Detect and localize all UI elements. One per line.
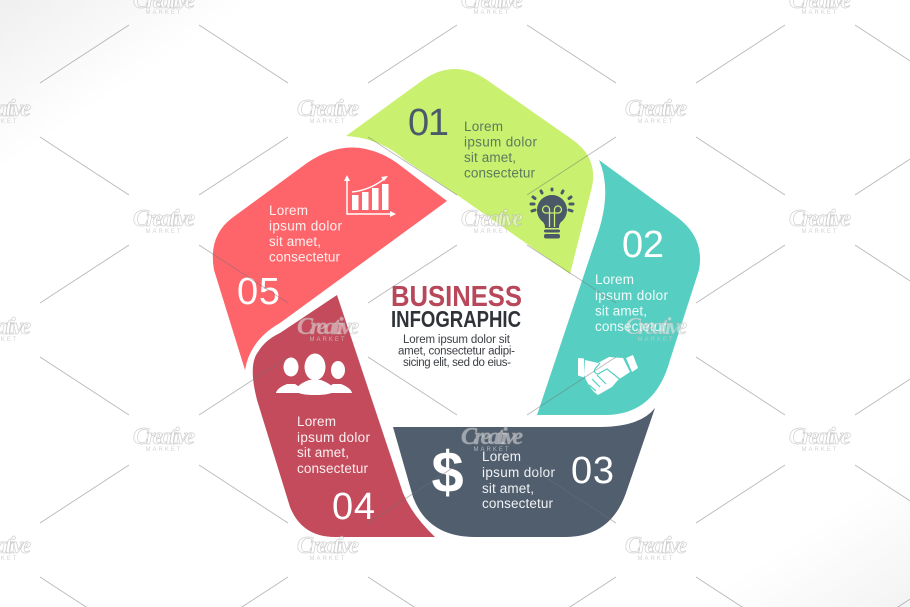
text: step 04: consectetur [297, 461, 368, 476]
icon: growth chart [344, 175, 396, 217]
watermarks: Creative [297, 314, 359, 340]
panel: step 04 [253, 295, 435, 537]
icon: light bulb [531, 189, 573, 238]
panel: step 05 [213, 148, 447, 370]
panel: step 02 [537, 160, 700, 415]
icon: handshake [578, 355, 638, 395]
text: step 04: ipsum dolor [297, 430, 370, 445]
text: step 05: Lorem [269, 203, 308, 218]
text: step 03: ipsum dolor [482, 465, 556, 480]
text: step 01 [464, 119, 538, 180]
dark segment [393, 408, 655, 537]
number 05: 05 [237, 271, 280, 313]
text: center description: sicing elit, sed do eius- [403, 357, 511, 369]
panel: step 03 [393, 408, 655, 537]
watermarks: MARKET [801, 447, 839, 453]
watermarks: Creative [461, 206, 523, 232]
number 02: 02 [622, 224, 664, 266]
watermarks: Creative [789, 206, 851, 232]
watermarks: MARKET [309, 337, 347, 343]
text: step 05 [269, 203, 342, 264]
watermarks: MARKET [473, 447, 511, 453]
text: step 03: Lorem [482, 449, 521, 464]
teal segment [537, 160, 700, 415]
watermarks: MARKET [637, 119, 675, 125]
text: step 04 [297, 414, 370, 476]
watermarks: MARKET [145, 229, 183, 235]
text: step 03: sit amet, [482, 481, 534, 496]
text: step 03: consectetur [482, 496, 554, 511]
text: step 01: ipsum dolor [464, 134, 538, 150]
watermarks: Creative [133, 206, 195, 232]
number 03: 03 [571, 450, 614, 492]
watermarks: Creative [625, 314, 687, 340]
text: step 02 [595, 272, 668, 334]
watermarks: Creative [625, 533, 687, 559]
text: step 02: Lorem [595, 272, 634, 287]
heading: infographic: INFOGRAPHIC [391, 306, 521, 332]
icon: people [276, 354, 352, 395]
text: step 02: consectetur [595, 319, 666, 334]
text: center description: amet, consectetur adipi- [398, 346, 515, 358]
watermarks: Creative [133, 424, 195, 450]
number 04: 04 [332, 486, 375, 528]
text: center description: Lorem ipsum dolor sit [403, 334, 511, 346]
watermarks: MARKET [145, 10, 183, 16]
icon: dollar sign: $ [431, 440, 464, 505]
panel: step 01 [346, 69, 593, 274]
watermarks: Creative [789, 424, 851, 450]
green segment [346, 69, 593, 274]
watermarks: Creative [297, 533, 359, 559]
text: step 05: sit amet, [269, 234, 321, 249]
watermarks: MARKET [473, 10, 511, 16]
coral segment [213, 148, 447, 370]
heading: business: BUSINESS [391, 281, 522, 313]
text: center description [398, 334, 515, 369]
text: step 01: consectetur [464, 166, 536, 180]
number 01: 01 [408, 102, 449, 144]
text: step 05: consectetur [269, 250, 340, 264]
watermarks: Creative [625, 96, 687, 122]
text: step 04: sit amet, [297, 445, 349, 460]
text: step 03 [482, 449, 556, 511]
watermarks: MARKET [637, 556, 675, 562]
watermarks: MARKET [637, 337, 675, 343]
watermarks: MARKET [309, 119, 347, 125]
watermarks: Creative [461, 424, 523, 450]
text: step 04: Lorem [297, 414, 336, 429]
watermarks: MARKET [309, 556, 347, 562]
text: step 02: ipsum dolor [595, 288, 668, 303]
text: step 05: ipsum dolor [269, 218, 342, 234]
watermarks: MARKET [801, 10, 839, 16]
text: step 02: sit amet, [595, 304, 647, 318]
text: step 01: Lorem [464, 119, 503, 134]
watermarks: MARKET [801, 229, 839, 235]
watermarks: MARKET [145, 447, 183, 453]
watermarks: Creative [297, 96, 359, 122]
crimson segment [253, 295, 435, 537]
watermarks: MARKET [473, 229, 511, 235]
center title [391, 281, 522, 369]
text: step 01: sit amet, [464, 150, 516, 165]
